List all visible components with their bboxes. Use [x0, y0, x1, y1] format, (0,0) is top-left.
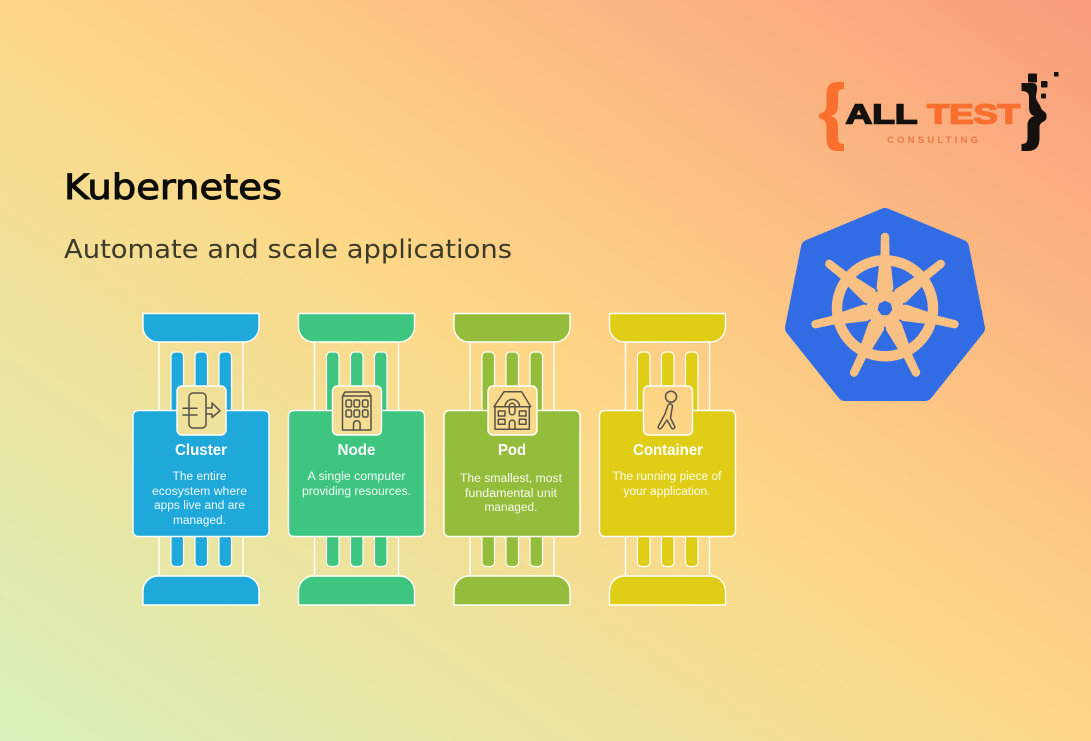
pillar capital [454, 314, 570, 342]
logo: consulting tagline: CONSULTING [887, 135, 978, 146]
description: cluster: ecosystem where [152, 486, 247, 498]
kubernetes helm logo [793, 216, 977, 393]
icon: cluster [183, 393, 220, 428]
icon box [177, 386, 226, 435]
logo: pixel squares [1028, 72, 1058, 98]
heading: node: Node [338, 442, 376, 459]
description: container: your application. [624, 486, 710, 498]
description: pod: managed. [484, 502, 538, 514]
icon: house [494, 392, 531, 429]
description: pod: fundamental unit [465, 488, 558, 500]
panel: container pillar [600, 314, 736, 605]
ship wheel [810, 233, 960, 380]
description: cluster: The entire [172, 471, 226, 483]
description: container: The running piece of [612, 471, 722, 483]
icon box [332, 386, 382, 435]
card [444, 410, 580, 536]
panel: pod pillar [444, 314, 580, 605]
pillar base [454, 576, 570, 605]
heading: container: Container [633, 442, 703, 459]
description: node [302, 471, 411, 498]
description: node: providing resources. [302, 486, 411, 498]
logo: AllTest Consulting [819, 72, 1058, 151]
description: cluster: apps live and are [154, 500, 245, 512]
pillar shaft [314, 342, 398, 577]
pillar base [610, 576, 726, 605]
pillar base [298, 576, 414, 605]
icon box [488, 386, 537, 435]
icon box [644, 386, 692, 435]
icon: building [342, 392, 371, 430]
heptagon [793, 216, 977, 393]
card [288, 410, 424, 536]
description: cluster [152, 471, 247, 527]
pillar shaft [159, 342, 243, 577]
description: pod: The smallest, most [460, 473, 563, 485]
icon: walking person [658, 391, 676, 429]
description: node: A single computer [308, 471, 406, 483]
pillar shaft [470, 342, 554, 577]
pillar shaft [626, 342, 710, 577]
pillar capital [143, 314, 259, 342]
panel: node pillar [288, 314, 424, 605]
heading: pod: Pod [498, 442, 526, 459]
card [600, 410, 736, 536]
title: Kubernetes [64, 168, 282, 208]
pillar capital [610, 314, 726, 342]
logo: TEST wordmark: TEST [927, 98, 1020, 130]
heading: cluster: Cluster [175, 442, 227, 459]
logo: left brace [819, 82, 844, 151]
logo: right brace [1022, 83, 1046, 151]
pillar capital [298, 314, 414, 342]
panel: cluster pillar [133, 314, 269, 605]
description: container [612, 471, 722, 498]
card [133, 410, 269, 536]
subtitle: Automate and scale applications [64, 235, 512, 265]
pillar base [143, 576, 259, 605]
logo: ALL wordmark: ALL [846, 98, 918, 130]
description: cluster: managed. [173, 515, 226, 527]
description: pod [460, 473, 563, 514]
